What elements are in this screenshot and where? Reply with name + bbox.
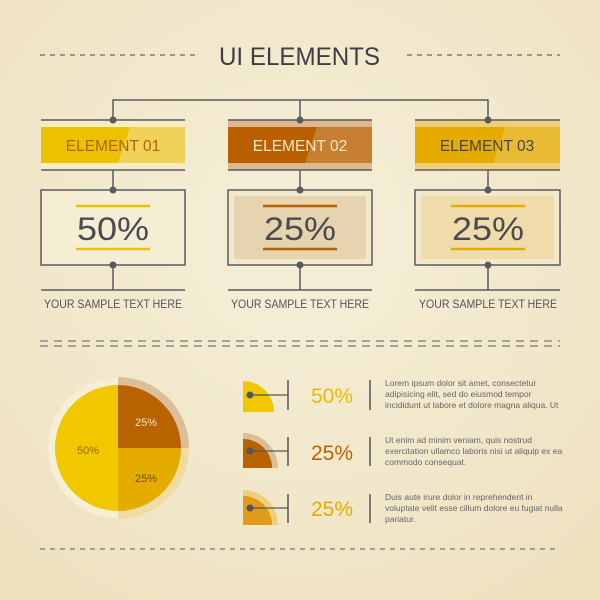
row 1: incididunt ut labore et dolore magna aliqua. Ut [385, 400, 559, 410]
row 2: 25% [311, 442, 353, 465]
panel: element 02: 25% [264, 211, 336, 247]
panel: element 02: YOUR SAMPLE TEXT HERE [231, 297, 369, 311]
pie chart: 25% [135, 473, 157, 485]
row 1: Lorem ipsum dolor sit amet, consectetur [385, 378, 536, 388]
panel: element 01: ELEMENT 01 [66, 138, 160, 155]
row 2: exercitation ullamco laboris nisi ut aliquip ex ea [385, 446, 562, 456]
panel: element 01: YOUR SAMPLE TEXT HERE [44, 297, 182, 311]
pie chart [48, 377, 189, 519]
row 3: Duis aute irure dolor in reprehenderit in [385, 492, 533, 502]
row 3: 25% [311, 498, 353, 521]
panel: element 03: ELEMENT 03 [440, 138, 534, 155]
panel: element 02 [228, 116, 372, 311]
row 1: adipisicing elit, sed do eiusmod tempor [385, 389, 532, 399]
row 1: 50% [311, 385, 353, 408]
panel: element 01: 50% [77, 211, 149, 247]
row 3 [243, 490, 563, 525]
row 2 [243, 433, 562, 468]
panel: element 03 [415, 116, 560, 311]
pie chart: 50% [77, 445, 99, 457]
panel: element 03: 25% [452, 211, 524, 247]
title: UI ELEMENTS [219, 43, 380, 71]
row 1 [243, 378, 559, 412]
row 3: voluptate velit esse cillum dolore eu fugiat nulla [385, 503, 563, 513]
row 2: Ut enim ad minim veniam, quis nostrud [385, 435, 532, 445]
panel: element 02: ELEMENT 02 [253, 138, 347, 155]
row 2: commodo consequat. [385, 457, 466, 467]
connector tree [113, 100, 488, 120]
row 3: pariatur. [385, 514, 416, 524]
panel: element 01 [41, 116, 185, 311]
panel: element 03: YOUR SAMPLE TEXT HERE [419, 297, 557, 311]
pie chart: 25% [135, 417, 157, 429]
